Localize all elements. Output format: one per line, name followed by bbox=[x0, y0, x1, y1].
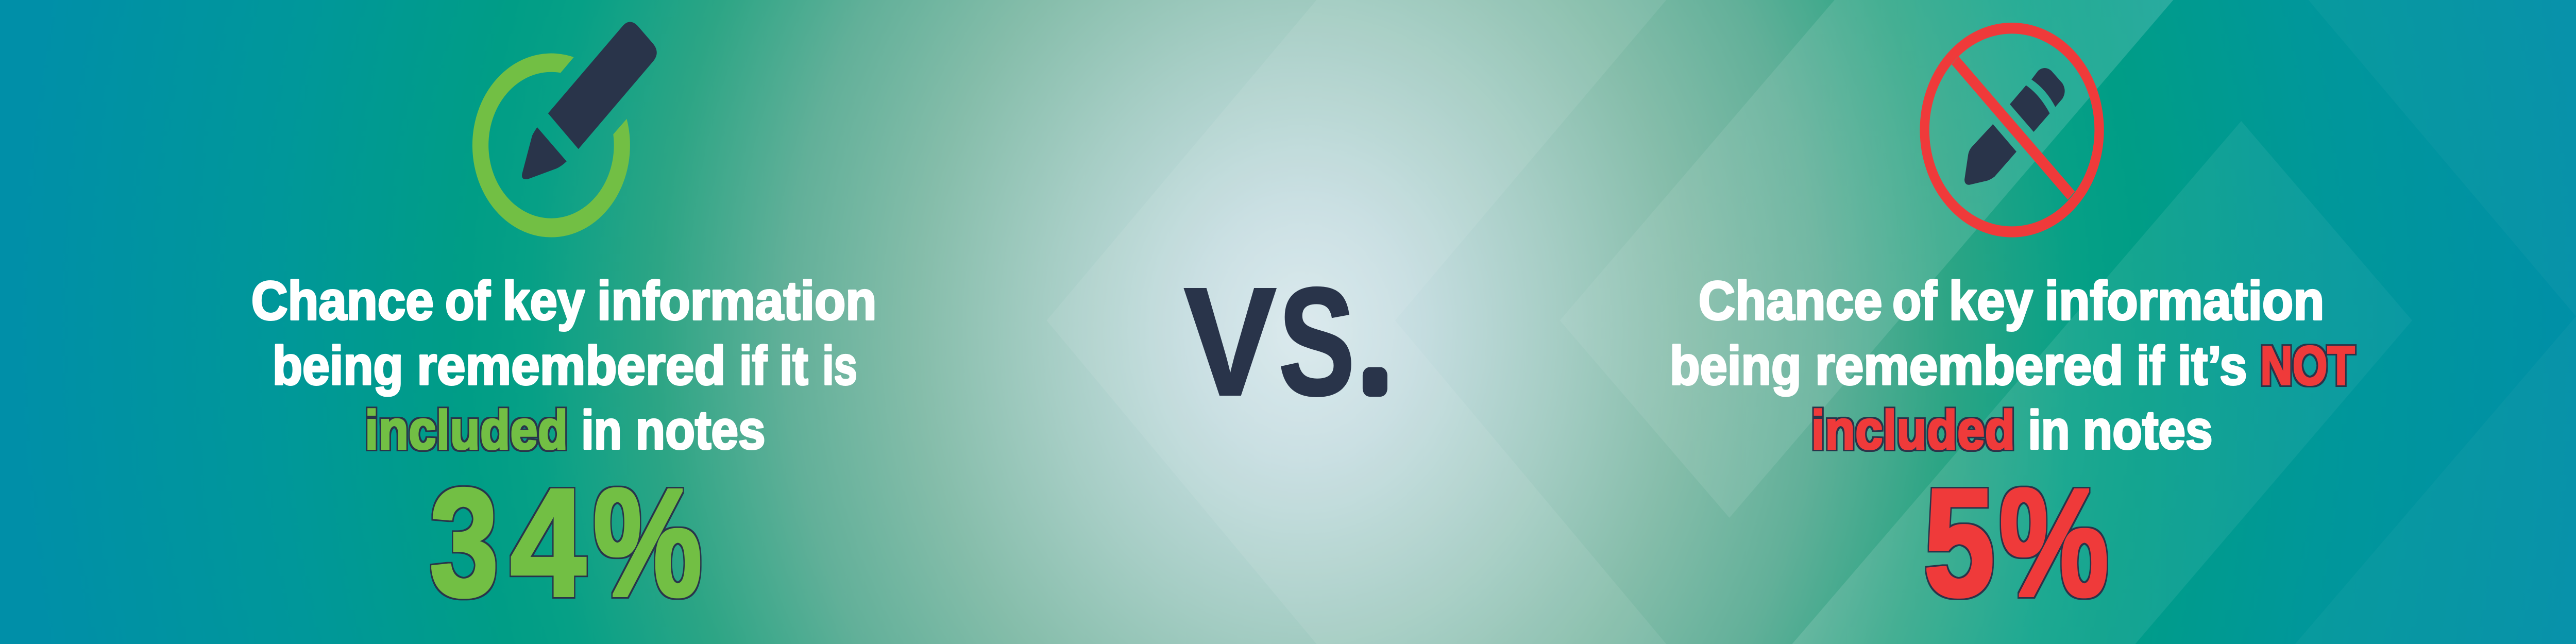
heading: chance if included: included bbox=[365, 400, 568, 461]
heading: chance if included: being bbox=[273, 335, 403, 396]
heading: chance if included: information bbox=[597, 270, 877, 331]
heading: chance if included: if bbox=[739, 335, 768, 396]
heading: chance if not included: included bbox=[1811, 400, 2015, 461]
heading: chance if not included: key bbox=[1949, 270, 2033, 331]
heading: chance if not included: remembered bbox=[1815, 335, 2123, 396]
heading: chance if included: remembered bbox=[417, 335, 725, 396]
statistic: 34%: % bbox=[593, 457, 702, 629]
heading: VS.: S bbox=[1279, 256, 1355, 428]
heading: chance if not included: information bbox=[2045, 270, 2324, 331]
heading: chance if not included: NOT bbox=[2260, 335, 2355, 396]
heading: VS.: . bbox=[1365, 310, 1385, 408]
panel: not included in notes bbox=[1670, 28, 2355, 629]
statistic: 34%: 4 bbox=[510, 457, 587, 629]
icon: crossed-out pencil bbox=[1925, 28, 2099, 232]
heading: chance if not included: if bbox=[2137, 335, 2165, 396]
heading: chance if not included: notes bbox=[2083, 400, 2213, 461]
heading: chance if included: it bbox=[779, 335, 808, 396]
heading: chance if included bbox=[251, 270, 877, 461]
heading: chance if not included bbox=[1670, 270, 2355, 461]
panel: included in notes bbox=[251, 22, 877, 629]
statistic: 5%: % bbox=[1999, 457, 2109, 629]
heading: chance if not included: of bbox=[1892, 270, 1937, 331]
heading: chance if included: Chance bbox=[251, 270, 434, 331]
heading: chance if included: key bbox=[502, 270, 585, 331]
heading: chance if included: in bbox=[581, 400, 622, 461]
heading: chance if included: of bbox=[445, 270, 490, 331]
heading: chance if included: is bbox=[822, 335, 857, 396]
heading: chance if not included: in bbox=[2028, 400, 2070, 461]
heading: chance if not included: being bbox=[1670, 335, 1801, 396]
heading: chance if not included: Chance bbox=[1699, 270, 1882, 331]
heading: VS.: V bbox=[1184, 256, 1277, 428]
heading: chance if included: notes bbox=[635, 400, 766, 461]
heading: chance if not included: it’s bbox=[2178, 335, 2247, 396]
icon: pencil in green ring bbox=[472, 22, 657, 238]
statistic: 34%: 3 bbox=[430, 457, 499, 629]
statistic: 5%: 5 bbox=[1924, 457, 1995, 629]
